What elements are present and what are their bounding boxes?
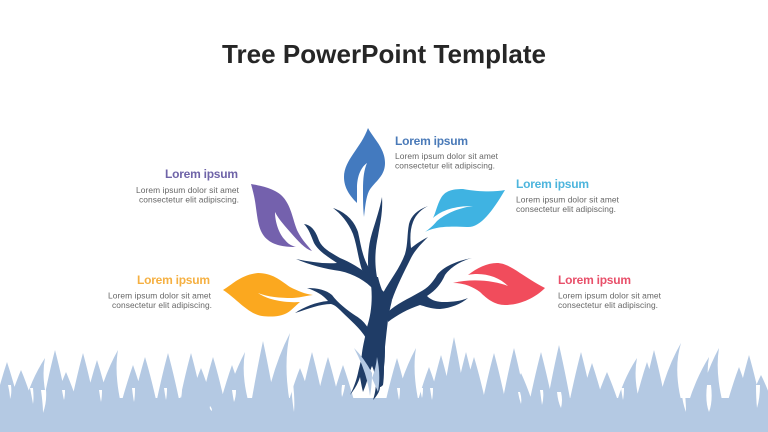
label: red: Lorem ipsum dolor sit amet: [558, 290, 662, 300]
grass blades over roots: [354, 348, 379, 396]
label: blue: consectetur elit adipiscing.: [395, 160, 495, 170]
trunk with roots: [350, 277, 392, 400]
label: orange: Lorem ipsum dolor sit amet: [108, 290, 212, 300]
leaf: orange: [223, 273, 313, 317]
label: blue: [395, 134, 499, 170]
leaf: red: [453, 263, 545, 305]
label: cyan: [516, 177, 620, 214]
right branch: [383, 206, 428, 300]
label: cyan: Lorem ipsum: [516, 177, 589, 191]
leaf: purple: [251, 184, 312, 251]
title: Tree PowerPoint Template: [222, 39, 546, 69]
label: blue: Lorem ipsum: [395, 134, 468, 148]
label: red: consectetur elit adipiscing.: [558, 300, 658, 310]
label: purple: Lorem ipsum dolor sit amet: [136, 185, 240, 195]
leaf: blue: [344, 128, 385, 217]
center branch: [368, 197, 382, 282]
left branch: [296, 224, 374, 290]
label: cyan: consectetur elit adipiscing.: [516, 204, 616, 214]
grass slits: [8, 383, 760, 413]
label: red: [558, 273, 662, 310]
label: orange: Lorem ipsum: [137, 273, 210, 287]
grass: [0, 333, 768, 432]
label: orange: [108, 273, 212, 310]
grass base and blades: [0, 333, 768, 432]
label: cyan: Lorem ipsum dolor sit amet: [516, 194, 620, 204]
right lower branch: [388, 258, 472, 322]
label: red: Lorem ipsum: [558, 273, 631, 287]
label: blue: Lorem ipsum dolor sit amet: [395, 151, 499, 161]
leaf: cyan: [425, 189, 505, 232]
tree: [295, 197, 472, 400]
upper left branch: [333, 208, 372, 284]
label: orange: consectetur elit adipiscing.: [112, 300, 212, 310]
left lower branch: [295, 288, 368, 338]
label: purple: [136, 167, 240, 204]
label: purple: Lorem ipsum: [165, 167, 238, 181]
label: purple: consectetur elit adipiscing.: [139, 194, 239, 204]
